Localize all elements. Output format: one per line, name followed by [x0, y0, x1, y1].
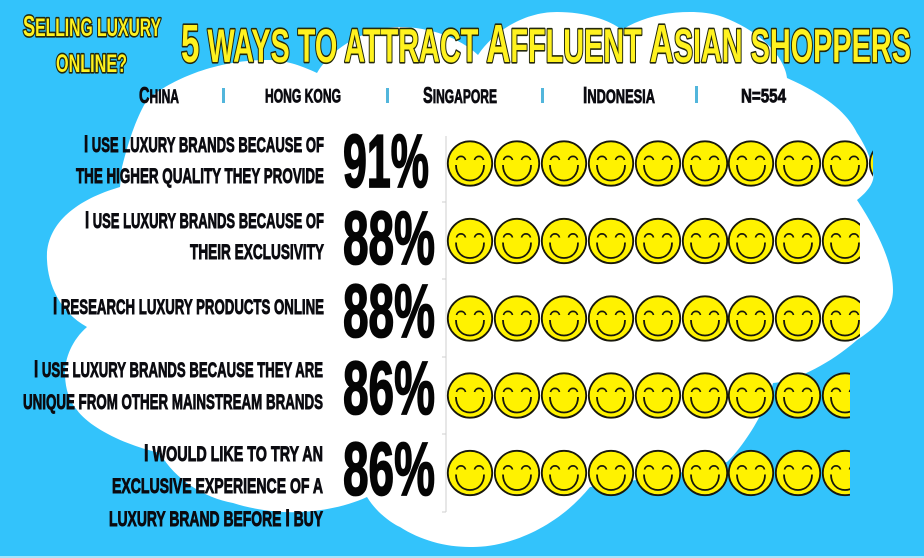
row 5 smileys: [448, 451, 867, 495]
side heading: SELLING LUXURY: [23, 11, 161, 43]
row 2 value: 88%: [343, 196, 435, 280]
bottom strip: [0, 556, 924, 558]
side heading: [23, 11, 161, 78]
row 4 smileys: [448, 373, 867, 418]
row 1 label: THE HIGHER QUALITY THEY PROVIDE: [76, 165, 324, 188]
row 4 label: UNIQUE FROM OTHER MAINSTREAM BRANDS: [23, 391, 323, 414]
row 1 label: I USE LUXURY BRANDS BECAUSE OF: [84, 131, 324, 158]
row 5 value: 86%: [343, 427, 435, 511]
country list: INDONESIA: [583, 82, 655, 108]
country list: HONG KONG: [265, 86, 341, 108]
row 2 label: I USE LUXURY BRANDS BECAUSE OF: [85, 207, 324, 234]
country list: N=554: [741, 86, 786, 108]
country list: SINGAPORE: [423, 82, 497, 108]
row 3 label: I RESEARCH LUXURY PRODUCTS ONLINE: [53, 293, 324, 320]
row 5 label: LUXURY BRAND BEFORE I BUY: [109, 505, 323, 532]
country list: [139, 82, 786, 108]
row 5 label: I WOULD LIKE TO TRY AN: [144, 440, 323, 467]
country list: CHINA: [139, 82, 179, 108]
row 3 value: 88%: [343, 269, 435, 353]
row 2 smileys: [448, 219, 867, 263]
row 4 label: [23, 356, 323, 414]
row 4 value: 86%: [343, 346, 435, 430]
side heading: ONLINE?: [56, 50, 127, 78]
row 1 value: 91%: [343, 119, 429, 203]
row 4 label: I USE LUXURY BRANDS BECAUSE THEY ARE: [34, 356, 323, 383]
axis: [442, 136, 446, 512]
row 5 label: [109, 440, 323, 532]
row 1 smileys: [448, 141, 914, 186]
row 3 smileys: [448, 296, 867, 341]
row 1 label: [76, 131, 324, 188]
row 2 label: [85, 207, 324, 264]
row 5 label: EXCLUSIVE EXPERIENCE OF A: [112, 475, 323, 498]
row 2 label: THEIR EXCLUSIVITY: [190, 241, 324, 264]
